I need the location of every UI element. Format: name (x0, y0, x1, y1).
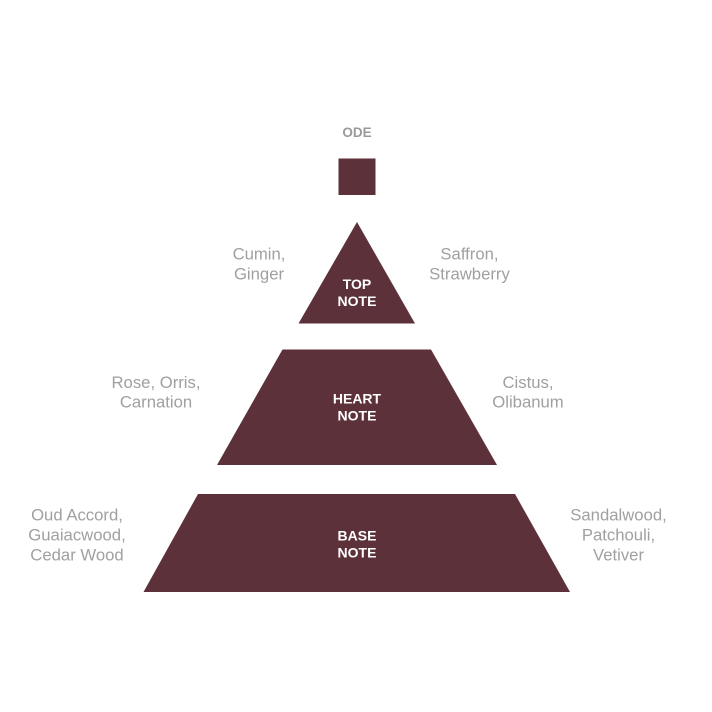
text: heart note left ingredients: Rose, Orris, (111, 373, 201, 392)
text: top note right ingredients: Saffron, (440, 244, 499, 264)
text: top note left ingredients: Cumin, (233, 244, 285, 264)
text: base note right ingredients (570, 506, 667, 564)
heading: ODE: ODE (342, 125, 372, 140)
text: heart note right ingredients (492, 373, 564, 412)
text: heart note right ingredients: Cistus, (502, 373, 554, 392)
text: heart note left ingredients (111, 373, 201, 412)
pyramid tier: top note: TOP (343, 276, 371, 292)
text: heart note left ingredients: Carnation (120, 392, 192, 412)
pyramid tier: base note: NOTE (338, 544, 376, 560)
text: top note right ingredients: Strawberry (429, 264, 510, 284)
text: base note left ingredients: Cedar Wood (30, 546, 124, 564)
pyramid tier: top note: NOTE (338, 293, 376, 309)
pyramid tier: heart note (217, 350, 497, 465)
pyramid tier: top note (298, 222, 415, 324)
text: base note left ingredients (28, 506, 126, 564)
text: base note left ingredients: Oud Accord, (31, 506, 123, 524)
text: base note right ingredients: Patchouli, (582, 526, 655, 544)
text: base note left ingredients: Guaiacwood, (28, 526, 126, 544)
pyramid tier: heart note: HEART (333, 390, 382, 406)
text: heart note right ingredients: Olibanum (492, 392, 564, 412)
pyramid tier: heart note: NOTE (338, 408, 376, 424)
text: top note left ingredients (233, 244, 285, 284)
text: top note left ingredients: Ginger (234, 264, 284, 284)
text: base note right ingredients: Sandalwood, (570, 506, 667, 524)
icon: square (338, 158, 376, 195)
text: base note right ingredients: Vetiver (593, 546, 644, 564)
pyramid tier: base note: BASE (338, 528, 376, 544)
pyramid tier: base note (144, 494, 570, 592)
text: top note right ingredients (429, 244, 510, 284)
